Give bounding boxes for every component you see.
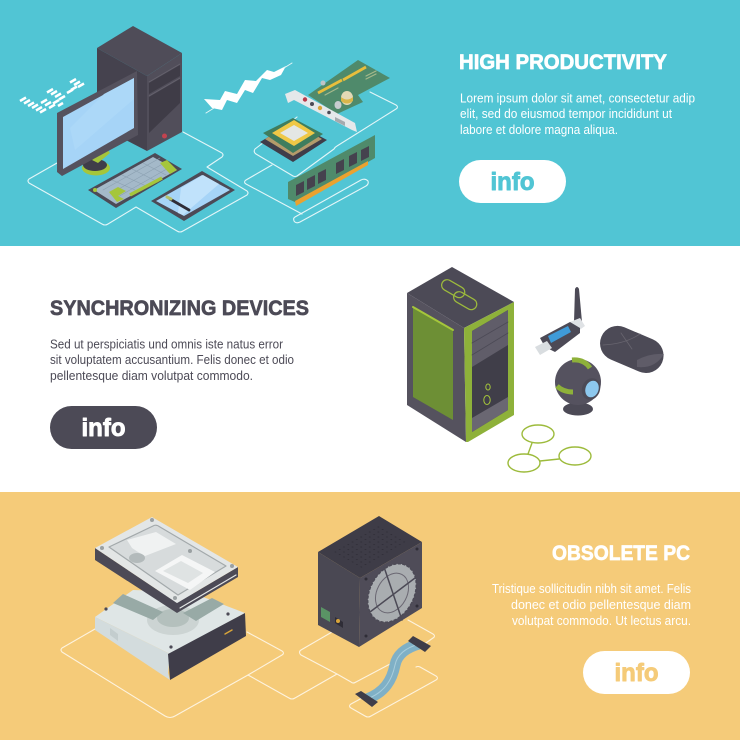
text block: [460, 90, 695, 137]
heading: OBSOLETE PC: [552, 541, 690, 565]
icon: hard drive: [95, 517, 238, 613]
panel: obsolete pc: [0, 492, 740, 740]
icon: wifi adapter: [535, 287, 585, 355]
text block: [50, 336, 294, 383]
icon: power supply: [318, 516, 426, 647]
icon: tablet: [151, 171, 235, 221]
text block: labore et dolore magna aliqua.: [460, 122, 618, 137]
button: info: [50, 406, 157, 449]
icon: memory module: [288, 135, 375, 206]
icon: equalizer: [20, 79, 84, 112]
circuit lines: [61, 620, 438, 718]
icon: keyboard: [88, 153, 182, 208]
heading: HIGH PRODUCTIVITY: [459, 50, 667, 74]
icon: green tower: [407, 267, 514, 442]
heading: SYNCHRONIZING DEVICES: [50, 296, 309, 320]
icon: sound wave: [204, 63, 292, 113]
icon: expansion card: [285, 60, 390, 132]
panel: high productivity: [0, 0, 740, 246]
icon: drive base: [95, 590, 246, 680]
text block: volutpat commodo. Ut lectus arcu.: [512, 613, 691, 628]
panel: synchronizing devices: [0, 246, 740, 492]
button: info: info: [614, 659, 658, 687]
text block: donec et odio pellentesque diam: [511, 597, 691, 612]
icon: webcam: [555, 359, 603, 416]
button: info: [583, 651, 690, 694]
circuit lines: [28, 92, 398, 232]
button: info: info: [82, 414, 126, 442]
text block: sit voluptatem accusantium. Felis donec et odio: [50, 352, 294, 367]
icon: monitor: [57, 71, 138, 176]
button: info: [459, 160, 566, 203]
text block: [492, 581, 691, 628]
icon: network nodes: [508, 425, 591, 472]
text block: pellentesque diam volutpat commodo.: [50, 368, 253, 383]
button: info: info: [490, 168, 534, 196]
icon: ribbon cable: [355, 636, 431, 707]
icon: computer tower: [97, 26, 182, 151]
text block: Sed ut perspiciatis und omnis iste natus error: [50, 336, 284, 352]
icon: processor: [260, 118, 327, 162]
text block: Lorem ipsum dolor sit amet, consectetur adip: [460, 90, 695, 106]
text block: elit, sed do eiusmod tempor incididunt ut: [460, 106, 672, 121]
text block: Tristique sollicitudin nibh sit amet. Felis: [492, 581, 691, 596]
icon: mouse: [595, 320, 669, 378]
